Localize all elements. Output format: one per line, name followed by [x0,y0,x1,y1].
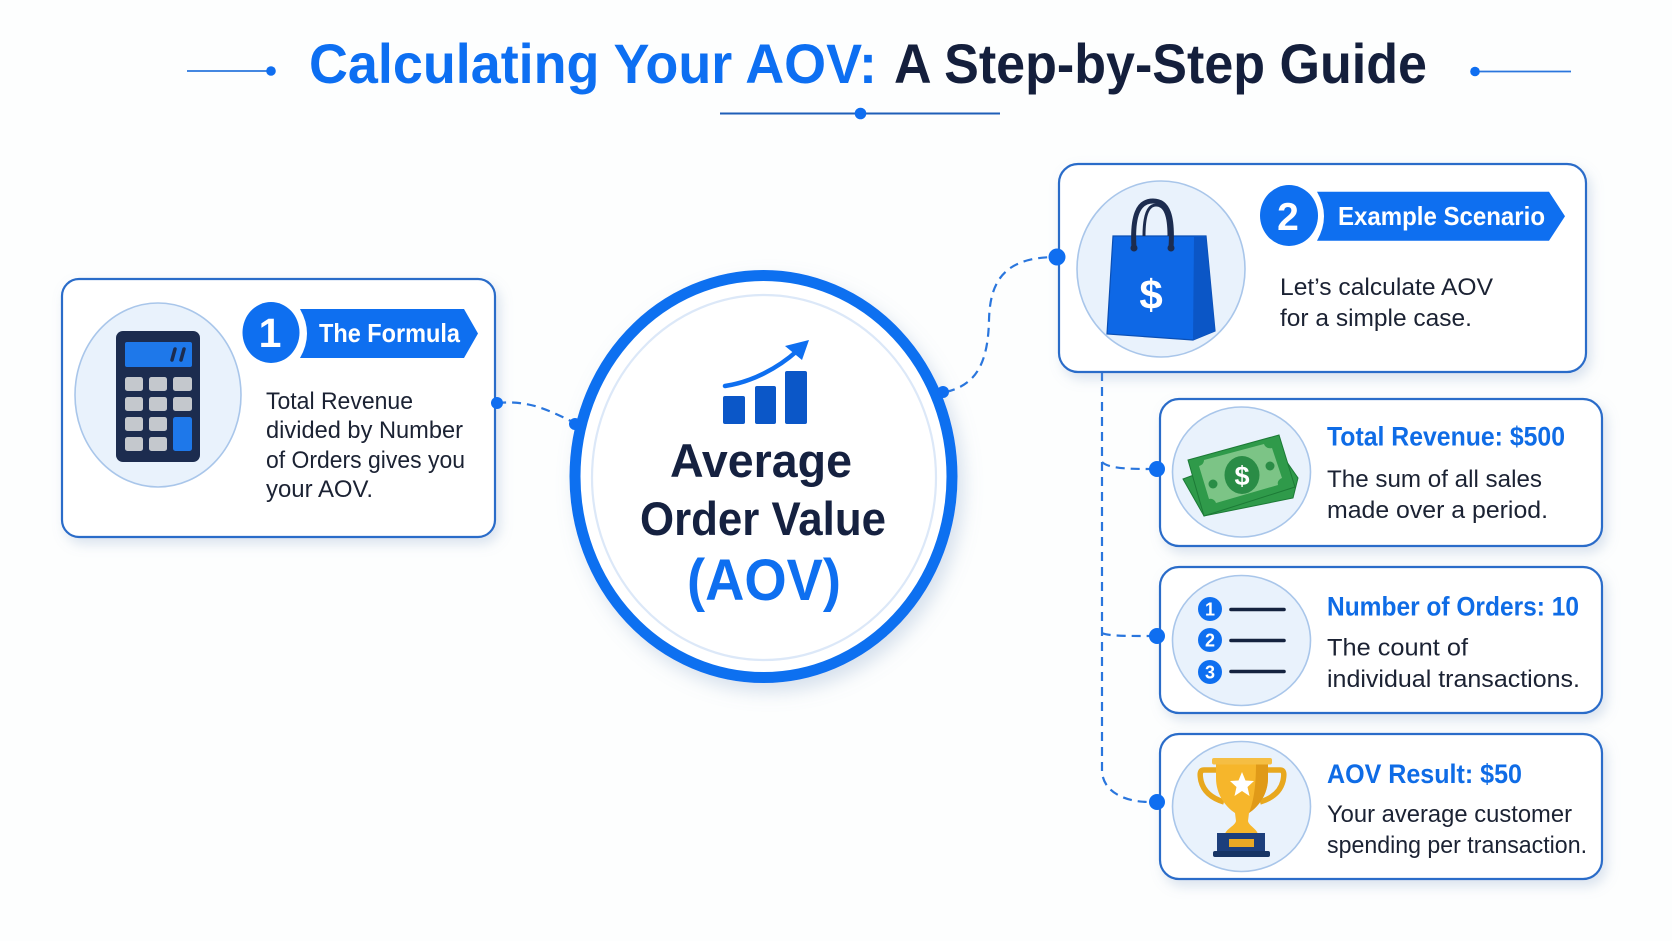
connector dot [1149,794,1165,810]
icon: cash [1172,407,1310,537]
center heading: (AOV) [687,548,841,613]
number badge 1: 1 [259,310,281,356]
body text: The count of [1327,635,1468,662]
number badge 2: 2 [1277,196,1299,239]
panel: step 2 example scenario [1048,164,1586,372]
body text: of Orders gives you [266,447,465,474]
icon: trophy [1172,742,1310,872]
card [1059,164,1586,372]
body text: made over a period. [1327,497,1548,524]
body text: Total Revenue [266,388,413,415]
body text: Your average customer [1327,801,1572,828]
outer ring [575,276,952,678]
icon: calculator [75,303,241,487]
ribbon heading [1317,192,1565,241]
icon: numbered list: 1 [1205,600,1215,620]
title [309,32,1427,95]
body text [266,388,465,503]
body text: your AOV. [266,476,373,503]
ribbon heading: The Formula [319,318,460,348]
inner ring [592,295,936,660]
body text: The sum of all sales [1327,466,1542,493]
title ornament left [187,66,276,76]
connector dot [1149,461,1165,477]
panel: number of orders [1149,567,1602,713]
title: Calculating Your AOV: [309,32,877,95]
connector dot [1048,248,1066,266]
panel: step 1 the formula [62,279,503,537]
title underline [720,108,1000,119]
panel: total revenue [1149,399,1602,546]
icon: shopping bag: $ [1139,271,1163,318]
ribbon heading: Example Scenario [1338,201,1545,231]
body text: spending per transaction. [1327,832,1587,859]
icon: growth chart [723,340,809,424]
body text [1327,801,1587,859]
icon: numbered list: 3 [1205,662,1215,682]
connector: formula to center [497,402,575,423]
panel: AOV result [1149,734,1602,879]
center heading: Average [670,434,852,487]
number badge 1 [242,302,300,363]
title ornament right [1470,67,1571,76]
card [1160,567,1602,713]
body text: divided by Number [266,417,463,444]
body text: for a simple case. [1280,305,1472,332]
connector dot [1149,628,1165,644]
center heading: Order Value [640,492,886,545]
heading: Total Revenue: $500 [1327,422,1565,452]
body text [1280,274,1494,332]
body text: individual transactions. [1327,666,1580,693]
icon: cash: $ [1234,461,1250,491]
heading: AOV Result: $50 [1327,759,1522,789]
number badge 2 [1260,185,1318,246]
heading: Number of Orders: 10 [1327,592,1579,622]
center heading [640,434,886,613]
title: A Step-by-Step Guide [894,32,1427,95]
body text: Let’s calculate AOV [1280,274,1494,301]
card [1160,399,1602,546]
body text [1327,466,1548,524]
icon: shopping bag [1077,181,1245,357]
card [62,279,495,537]
connector: center to example [946,257,1057,392]
connector dot [491,397,503,409]
card [1160,734,1602,879]
icon: numbered list [1172,576,1310,706]
panel: center AOV circle [569,276,952,678]
body text [1327,635,1580,693]
icon: numbered list: 2 [1205,630,1215,650]
connector: example to steps [1102,372,1150,802]
ring connector bumps [569,386,949,430]
ribbon heading [300,309,478,358]
